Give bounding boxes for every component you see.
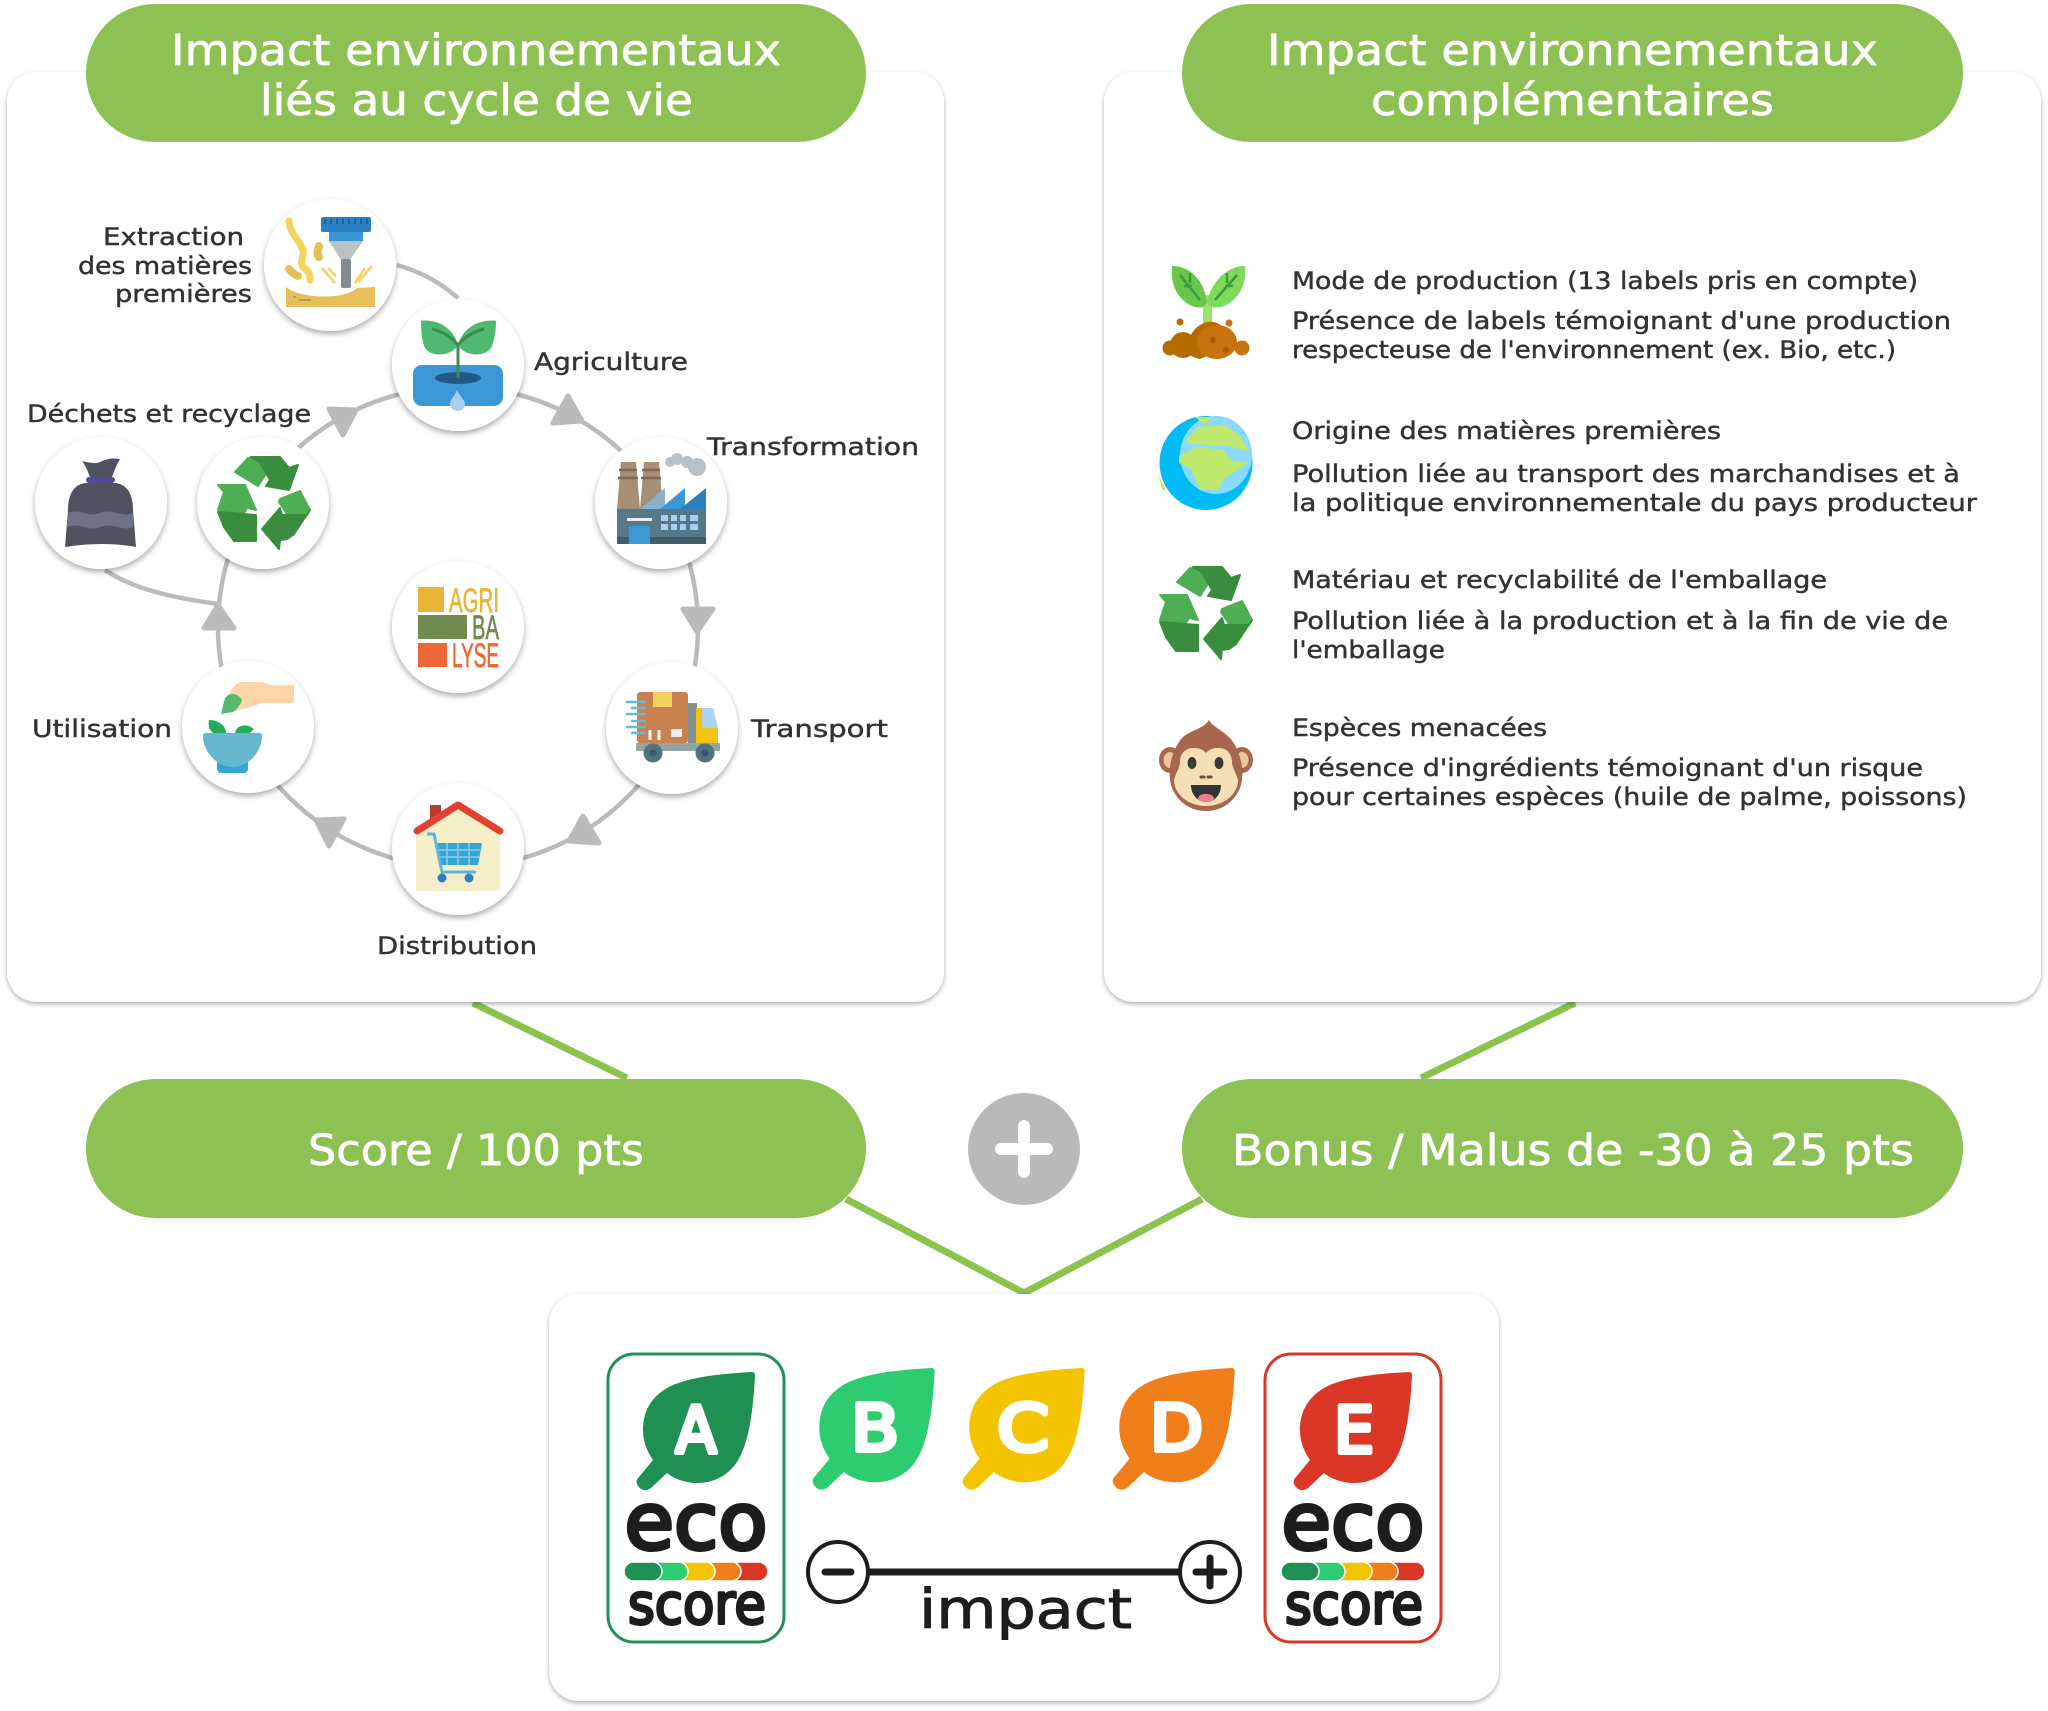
step: extraction — [264, 199, 396, 331]
icon: earth — [1159, 416, 1252, 510]
pill: bonus malus: Bonus / Malus de -30 à 25 pts — [1232, 1126, 1914, 1176]
item: production mode — [1162, 266, 1951, 364]
label: utilisation: Utilisation — [32, 715, 172, 743]
text: origin — [1292, 417, 1977, 517]
label: waste and recycling: Déchets et recyclage — [27, 400, 311, 428]
heading: life cycle impacts: Impact environnementaux — [171, 26, 781, 76]
panel: complementary impacts — [1104, 72, 2041, 1002]
heading: complementary impacts: Impact environnementaux — [1267, 26, 1878, 76]
badge: eco-score A: score — [628, 1572, 766, 1638]
text: packaging: Matériau et recyclabilité de l'emballage — [1292, 566, 1827, 594]
label: agriculture: Agriculture — [534, 348, 688, 376]
text: origin: la politique environnementale du pays producteur — [1292, 489, 1977, 517]
badge: eco-score A — [608, 1354, 784, 1642]
step: utilisation — [182, 661, 314, 793]
text: packaging: Pollution liée à la production et à la fin de vie de — [1292, 607, 1948, 635]
heading: life cycle impacts — [86, 4, 866, 142]
icon: monkey — [1159, 720, 1253, 811]
label: extraction — [78, 223, 252, 308]
letter B: B — [851, 1392, 899, 1466]
heading: complementary impacts: complémentaires — [1371, 76, 1774, 126]
text: origin: Pollution liée au transport des marchandises et à — [1292, 460, 1960, 488]
text: production mode: respecteuse de l'environnement (ex. Bio, etc.) — [1292, 336, 1896, 364]
logo: Agribalyse: BA — [472, 609, 499, 647]
text: production mode: Présence de labels témoignant d'une production — [1292, 307, 1951, 335]
item: origin — [1159, 416, 1977, 517]
impact scale: impact — [919, 1578, 1132, 1641]
logo: Agribalyse — [392, 561, 524, 693]
heading: complementary impacts — [1182, 4, 1963, 142]
item: endangered species — [1159, 714, 1967, 811]
leaf C — [963, 1368, 1085, 1490]
badge: eco-score E: eco — [1282, 1478, 1424, 1568]
step: waste bag — [35, 437, 167, 569]
step: transformation — [595, 437, 727, 569]
step: recycling — [197, 437, 329, 569]
text: production mode — [1292, 267, 1951, 364]
text: origin: Origine des matières premières — [1292, 417, 1721, 445]
step: distribution — [392, 783, 524, 915]
panel: life cycle — [7, 72, 944, 1002]
pill: score — [86, 1079, 866, 1218]
item: packaging — [1160, 566, 1948, 664]
text: packaging — [1292, 566, 1948, 664]
label: distribution: Distribution — [377, 932, 537, 960]
badge: eco-score E: E — [1334, 1394, 1374, 1468]
connector lines — [473, 1003, 1575, 1293]
pill: score: Score / 100 pts — [308, 1126, 644, 1176]
label: extraction: premières — [115, 280, 252, 308]
label: extraction: Extraction — [103, 223, 244, 251]
panel: eco-score scale — [549, 1294, 1499, 1701]
label: extraction: des matières — [78, 252, 252, 280]
badge: eco-score E — [1265, 1354, 1441, 1642]
impact scale — [808, 1542, 1240, 1641]
label: transformation: Transformation — [706, 433, 919, 461]
badge: eco-score A: eco — [624, 1478, 768, 1568]
text: packaging: l'emballage — [1292, 636, 1445, 664]
letter D: D — [1150, 1392, 1203, 1466]
label: transport: Transport — [750, 715, 888, 743]
badge: eco-score E: score — [1285, 1572, 1423, 1638]
pill: bonus malus — [1182, 1079, 1963, 1218]
text: endangered species — [1292, 714, 1967, 811]
icon: recycling — [1160, 567, 1252, 659]
cycle ring and arrows — [105, 265, 713, 867]
heading: life cycle impacts: liés au cycle de vie — [260, 76, 693, 126]
text: endangered species: Espèces menacées — [1292, 714, 1547, 742]
icon: plus — [968, 1093, 1080, 1205]
text: endangered species: pour certaines espèces (huile de palme, poissons) — [1292, 783, 1967, 811]
letter C: C — [997, 1392, 1049, 1466]
step: agriculture — [392, 299, 524, 431]
badge: eco-score A: A — [676, 1394, 717, 1468]
logo: Agribalyse: LYSE — [452, 637, 499, 675]
leaf D — [1113, 1368, 1235, 1490]
text: production mode: Mode de production (13 labels pris en compte) — [1292, 267, 1918, 295]
logo: Agribalyse: AGRI — [449, 582, 499, 620]
icon: sprout in soil — [1162, 266, 1250, 359]
step: transport — [606, 662, 738, 794]
text: endangered species: Présence d'ingrédients témoignant d'un risque — [1292, 754, 1923, 782]
leaf B — [813, 1368, 935, 1490]
